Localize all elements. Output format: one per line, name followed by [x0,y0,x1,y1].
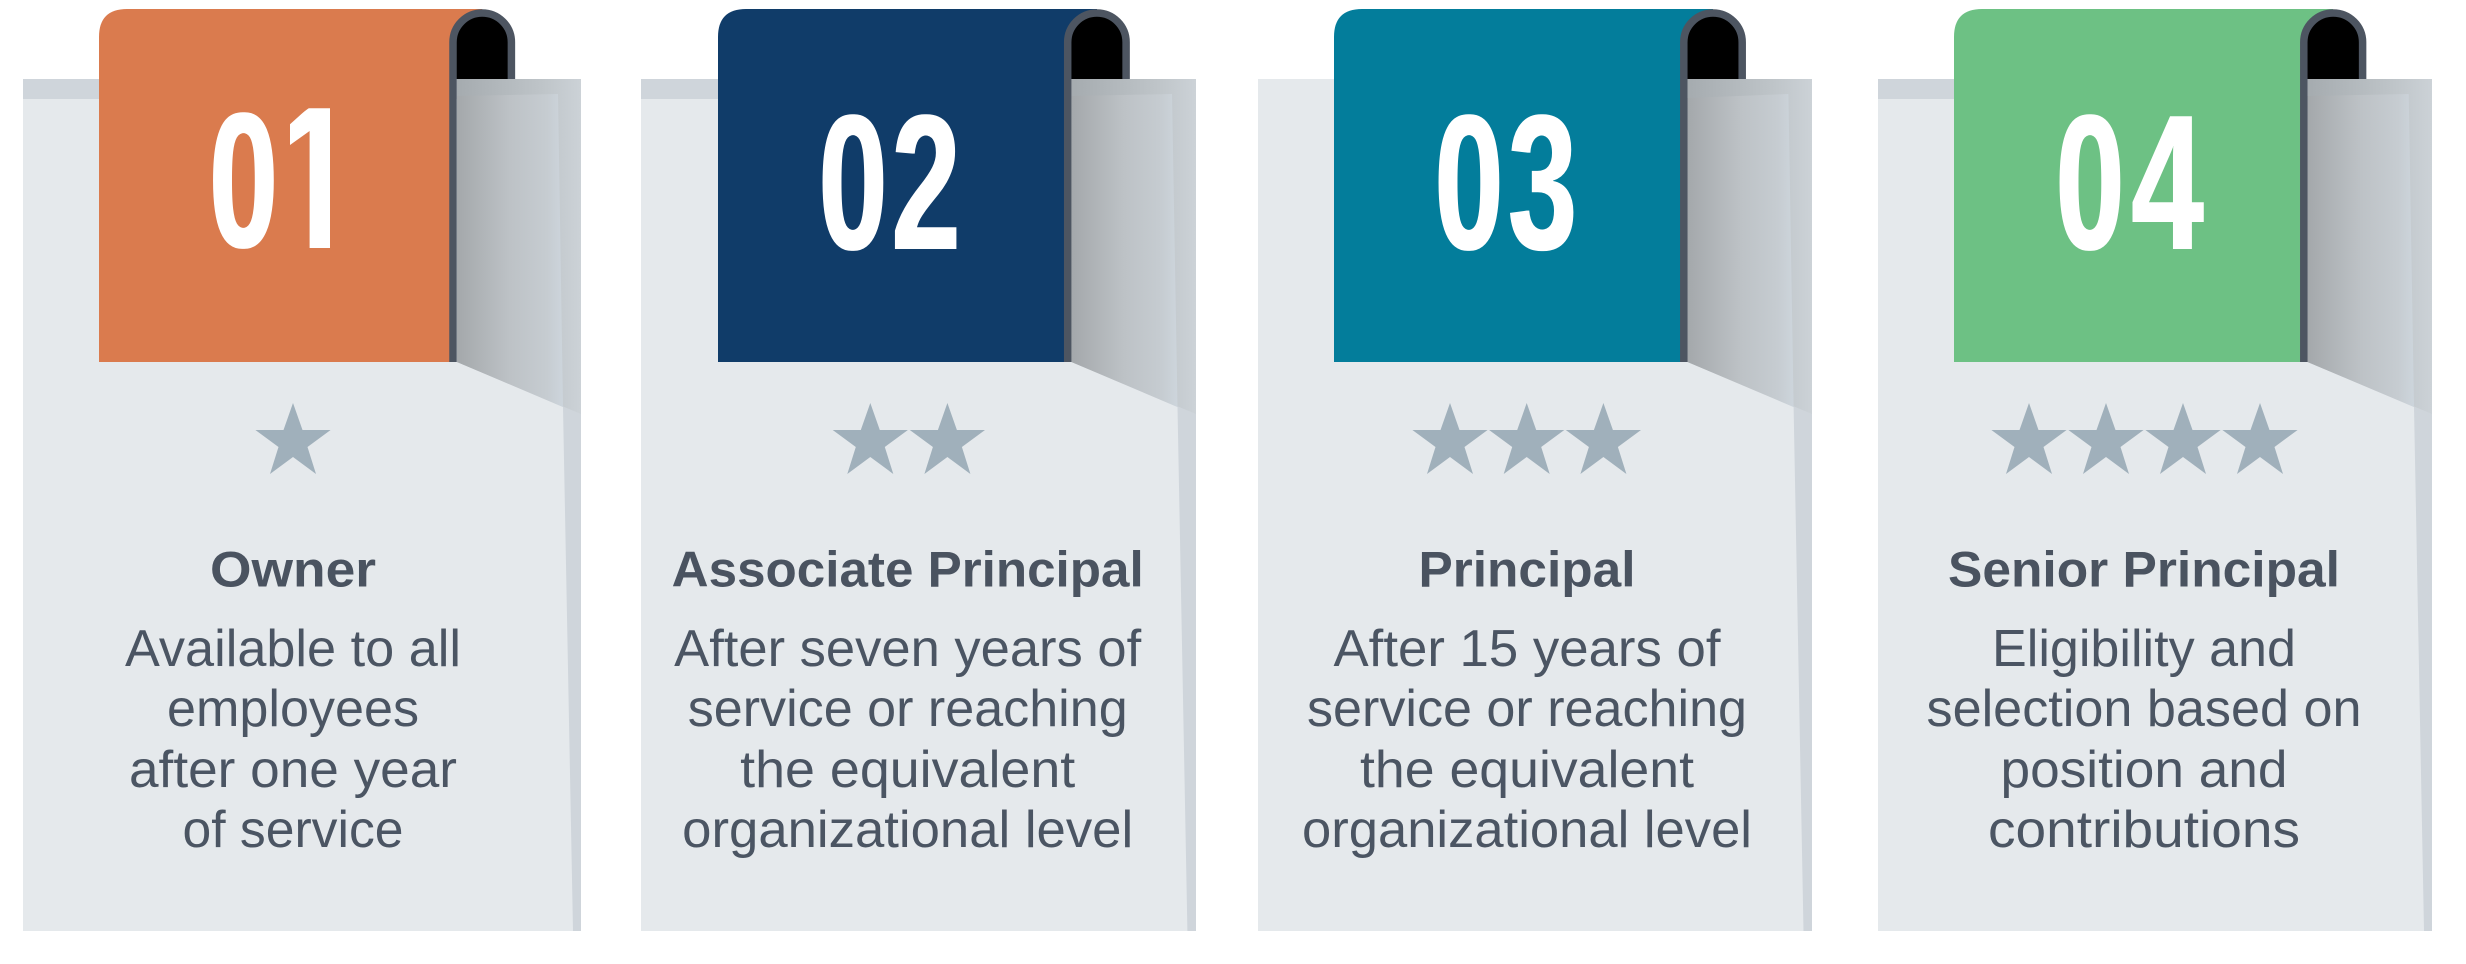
bookmark tab [1954,9,2363,362]
number 03 [1435,75,1577,291]
bookmark tab [1334,9,1742,362]
description [125,620,461,859]
number 03: 3 [1508,75,1577,291]
card background [1878,79,2432,931]
description: employees [167,680,419,738]
number 04: 0 [2056,75,2124,291]
description [1302,620,1752,859]
description: service or reaching [1307,680,1747,738]
number 04 [2056,74,2203,291]
heading: Owner: Owner [210,542,376,598]
description [1926,620,2362,859]
bookmark tab [99,9,511,362]
stars: 4 [1991,403,2298,474]
description: after one year [129,741,457,799]
description: position and [2000,741,2288,799]
description: After seven years of [674,620,1142,678]
panel: 04 Senior Principal [1878,9,2432,931]
description: of service [182,801,404,859]
description: contributions [1988,801,2300,859]
panel: 02 Associate Principal [641,9,1196,931]
description [674,620,1142,859]
number 01 [213,108,330,249]
description: the equivalent [1360,741,1695,799]
description: selection based on [1926,680,2362,738]
description: organizational level [1302,801,1752,859]
stars: 3 [1412,403,1641,474]
bookmark tab [718,9,1126,362]
description: Eligibility and [1992,620,2296,678]
card background [641,79,1196,931]
card background [23,79,581,931]
number 02 [819,75,960,291]
number 04: 4 [2132,74,2203,290]
description: organizational level [682,801,1133,859]
number 03: 0 [1435,75,1503,291]
description: Available to all [125,620,461,678]
number 02: 0 [819,75,887,291]
panel: 01 Owner [23,9,581,931]
panel: 03 Principal [1258,9,1812,931]
number 01: 0 [209,73,278,289]
number 02: 2 [892,75,960,291]
heading: Principal: Principal [1418,542,1636,598]
heading: Associate Principal: Associate Principal [672,542,1144,598]
stars: 1 [255,403,331,474]
card background [1258,79,1812,931]
heading: Senior Principal: Senior Principal [1948,542,2340,598]
description: service or reaching [688,680,1128,738]
description: the equivalent [740,741,1076,799]
description: After 15 years of [1334,620,1721,678]
stars: 2 [833,403,985,474]
number 01: 1 [278,73,356,288]
